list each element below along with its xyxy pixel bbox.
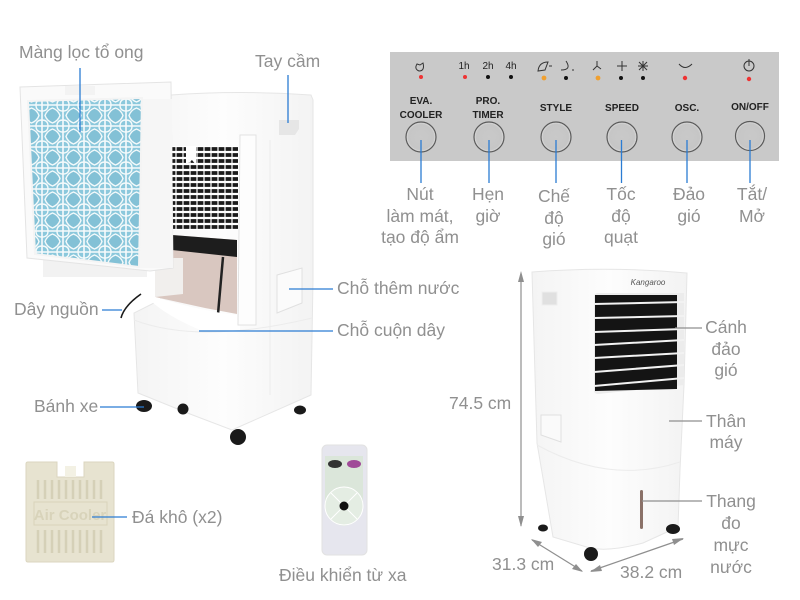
callout: louvers bbox=[675, 317, 747, 380]
callouts: control panel: giờ bbox=[475, 206, 501, 226]
caption: remote control: Điều khiển từ xa bbox=[279, 565, 407, 585]
callouts: control panel: Đảo bbox=[673, 184, 705, 204]
callout: water inlet: Chỗ thêm nước bbox=[337, 277, 460, 298]
button captions: PRO. bbox=[476, 96, 500, 107]
callouts: control panel: độ bbox=[544, 208, 564, 228]
callout: body bbox=[669, 411, 746, 452]
dimension: height: 74.5 cm bbox=[449, 393, 511, 413]
button captions: STYLE bbox=[540, 103, 572, 114]
callouts: control panel bbox=[381, 140, 767, 249]
callout: honeycomb filter: Màng lọc tổ ong bbox=[19, 42, 144, 62]
callout: wheels bbox=[34, 396, 144, 416]
honeycomb filter bbox=[20, 82, 173, 277]
callout: cord storage: Chỗ cuộn dây bbox=[337, 319, 445, 340]
button captions: TIMER bbox=[472, 110, 504, 121]
round buttons bbox=[406, 122, 764, 152]
ice pack: Air Cooler bbox=[34, 507, 106, 524]
dimension: width bbox=[590, 538, 684, 582]
callouts: control panel: Tắt/ bbox=[737, 183, 767, 204]
panel icons and indicator lights: 2h bbox=[482, 61, 494, 72]
control panel bbox=[390, 52, 779, 161]
cooler body bbox=[134, 92, 313, 430]
side column bbox=[238, 135, 256, 325]
air vent louvers bbox=[594, 293, 684, 394]
remote control bbox=[322, 445, 367, 555]
panel icons and indicator lights bbox=[416, 59, 754, 81]
fan grille bbox=[171, 146, 238, 230]
callout: wheels: Bánh xe bbox=[34, 396, 98, 416]
button captions: COOLER bbox=[400, 110, 443, 121]
handle bbox=[279, 120, 299, 135]
side hatch bbox=[277, 268, 302, 313]
dimension: depth: 31.3 cm bbox=[492, 554, 554, 574]
water tank opening bbox=[150, 235, 240, 330]
brand name: Kangaroo bbox=[631, 278, 666, 287]
callouts: control panel: Tốc bbox=[606, 184, 636, 204]
callout: louvers: gió bbox=[714, 360, 738, 380]
callout: power cord: Dây nguồn bbox=[14, 299, 99, 319]
callout: water gauge: nước bbox=[710, 557, 752, 577]
callouts: control panel: làm mát, bbox=[386, 206, 454, 226]
callouts: control panel: tạo độ ẩm bbox=[381, 227, 459, 247]
callouts: control panel: Mở bbox=[739, 206, 765, 226]
callout: handle: Tay cầm bbox=[255, 51, 320, 71]
cooler shell bbox=[532, 269, 687, 549]
wheels bbox=[538, 524, 680, 561]
product: closed air cooler bbox=[532, 269, 687, 561]
callouts: control panel: gió bbox=[542, 229, 566, 249]
callouts: control panel: gió bbox=[677, 206, 701, 226]
callout: body: Thân bbox=[706, 411, 746, 431]
callouts: control panel: Hẹn bbox=[472, 184, 504, 204]
button captions: ON/OFF bbox=[731, 102, 769, 113]
button captions: OSC. bbox=[675, 103, 699, 114]
panel icons and indicator lights: 1h bbox=[458, 61, 470, 72]
water level gauge bbox=[640, 490, 643, 529]
callout: honeycomb filter bbox=[19, 42, 144, 132]
callout: handle bbox=[255, 51, 320, 123]
callout: water gauge: Thang bbox=[706, 491, 756, 511]
dimension: depth bbox=[492, 539, 583, 574]
power cord bbox=[121, 294, 141, 318]
wheels bbox=[136, 400, 306, 445]
dimension: width: 38.2 cm bbox=[620, 562, 682, 582]
callout: water gauge bbox=[642, 491, 756, 577]
callout: body: máy bbox=[709, 432, 743, 452]
button captions bbox=[400, 96, 769, 121]
panel icons and indicator lights: 4h bbox=[505, 61, 517, 72]
callouts: control panel: Chế bbox=[538, 186, 570, 206]
callout: louvers: Cánh bbox=[705, 317, 747, 337]
callout: louvers: đảo bbox=[711, 339, 741, 359]
callouts: control panel: quạt bbox=[604, 227, 638, 247]
callout: ice pack bbox=[92, 507, 222, 527]
handle bbox=[542, 292, 557, 305]
side hatch bbox=[541, 415, 561, 442]
product: open air cooler bbox=[121, 92, 313, 445]
ice pack bbox=[26, 462, 114, 562]
button captions: SPEED bbox=[605, 103, 639, 114]
callout: water gauge: đo bbox=[721, 513, 741, 533]
button captions: EVA. bbox=[410, 96, 433, 107]
callouts: control panel: Nút bbox=[406, 184, 434, 204]
callouts: control panel: độ bbox=[611, 206, 631, 226]
dimension: height bbox=[449, 271, 524, 527]
callout: water gauge: mực bbox=[713, 535, 749, 555]
callout: ice pack: Đá khô (x2) bbox=[132, 507, 222, 527]
